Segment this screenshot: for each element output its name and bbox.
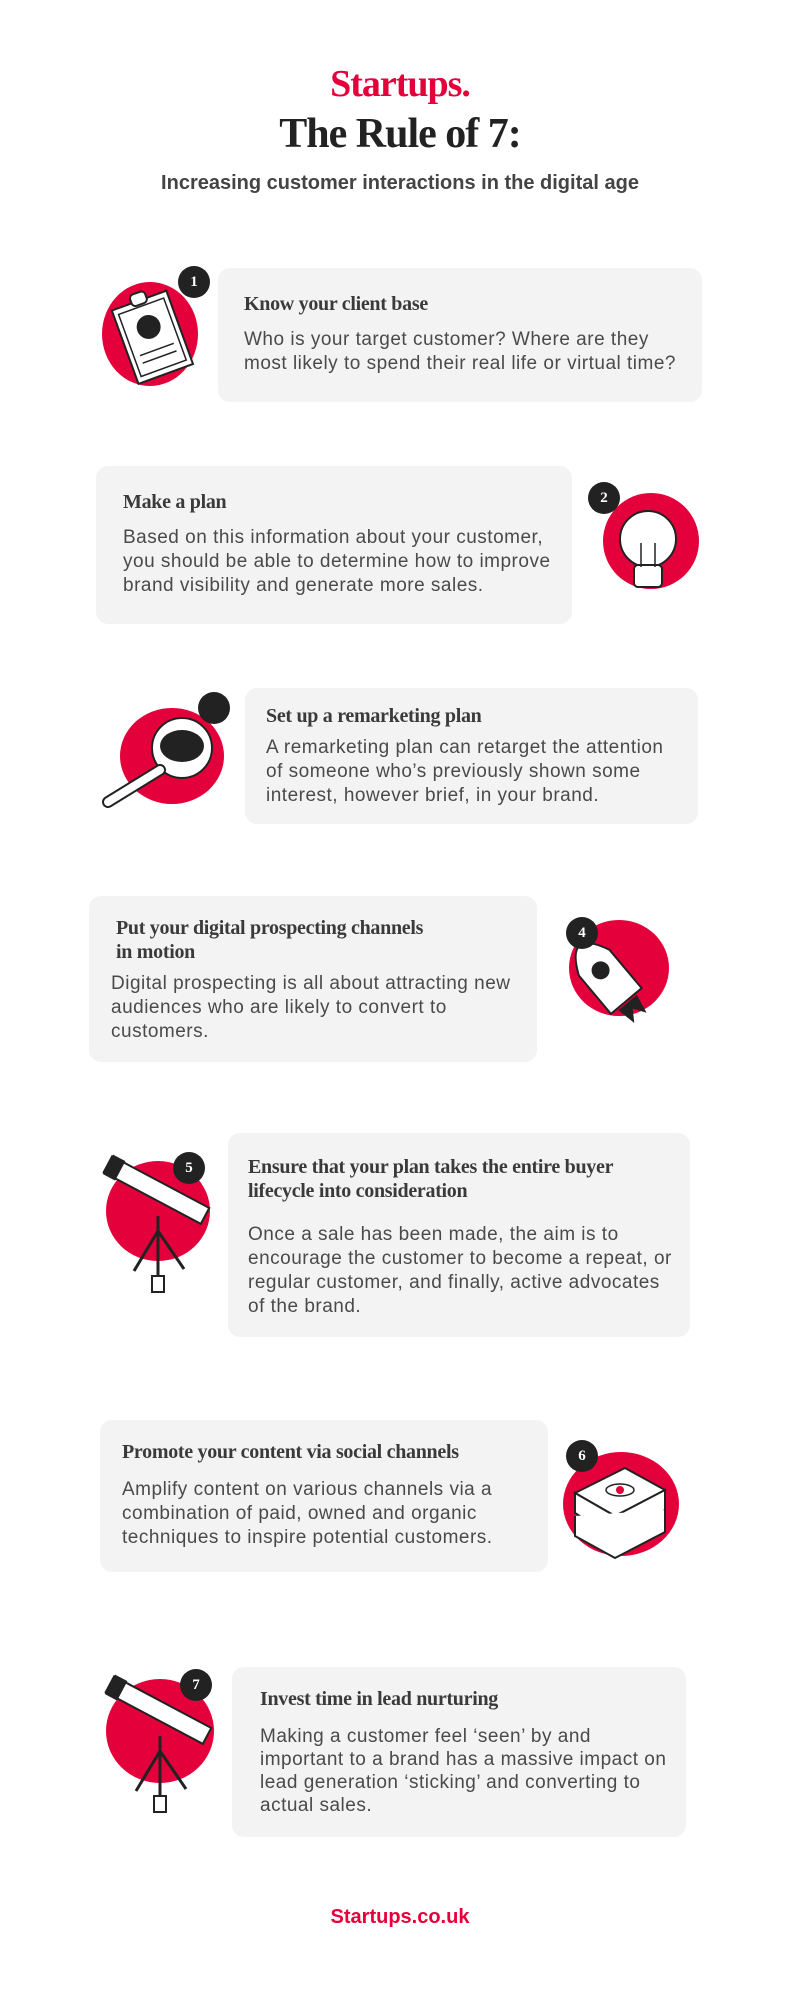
card 2: Make a plan: [123, 491, 226, 513]
badge 2: 2: [600, 490, 608, 506]
icon: telescope: [102, 1154, 211, 1293]
card 2: you should be able to determine how to improve: [123, 551, 551, 572]
card 7: Making a customer feel ‘seen’ by and: [260, 1726, 591, 1747]
icon: lightbulb: [603, 493, 699, 589]
card 6: Amplify content on various channels via a: [122, 1479, 492, 1500]
title: The Rule of 7:: [279, 111, 521, 157]
card 7: actual sales.: [260, 1795, 372, 1816]
card 1: [218, 268, 702, 402]
icon: clipboard: [102, 282, 198, 386]
card 3: [245, 688, 698, 824]
card 7: important to a brand has a massive impact on: [260, 1749, 666, 1770]
card 5: encourage the customer to become a repeat, or: [248, 1248, 672, 1269]
card 5: Ensure that your plan takes the entire buyer: [248, 1156, 613, 1178]
badge 2: [588, 482, 620, 514]
card 5: lifecycle into consideration: [248, 1180, 467, 1202]
step 6: [100, 1420, 679, 1572]
badge 5: 5: [185, 1160, 193, 1176]
card 6: Promote your content via social channels: [122, 1441, 459, 1463]
card 4: Digital prospecting is all about attracting new: [111, 973, 510, 994]
card 7: [232, 1667, 686, 1837]
badge 4: 4: [578, 925, 586, 941]
card 2: Based on this information about your customer,: [123, 527, 543, 548]
step 3: [102, 688, 698, 824]
step 2: [96, 466, 699, 624]
card 2: [96, 466, 572, 624]
logo: Startups.: [330, 63, 470, 105]
card 1: most likely to spend their real life or virtual time?: [244, 353, 676, 374]
card 6: [100, 1420, 548, 1572]
icon: rocket: [569, 920, 669, 1023]
card 4: audiences who are likely to convert to: [111, 997, 447, 1018]
card 5: regular customer, and finally, active advocates: [248, 1272, 660, 1293]
badge 6: [566, 1440, 598, 1472]
card 4: Put your digital prospecting channels: [116, 917, 423, 939]
icon: books: [563, 1452, 679, 1560]
badge 7: [180, 1669, 212, 1701]
badge 6: 6: [578, 1448, 586, 1464]
card 3: interest, however brief, in your brand.: [266, 785, 599, 806]
step 1: [102, 266, 702, 402]
icon: magnifier: [102, 708, 224, 808]
badge 7: 7: [192, 1677, 200, 1693]
icon: telescope: [104, 1674, 214, 1813]
badge 1: 1: [190, 274, 198, 290]
card 2: brand visibility and generate more sales.: [123, 575, 484, 596]
card 7: Invest time in lead nurturing: [260, 1688, 498, 1710]
step 4: [89, 896, 669, 1062]
card 1: Know your client base: [244, 293, 428, 315]
card 4: [89, 896, 537, 1062]
badge 4: [566, 917, 598, 949]
card 5: Once a sale has been made, the aim is to: [248, 1224, 619, 1245]
card 3: A remarketing plan can retarget the attention: [266, 737, 663, 758]
subtitle: Increasing customer interactions in the digital age: [161, 172, 639, 194]
badge 3: [198, 692, 230, 724]
step 5: [102, 1133, 690, 1337]
card 4: customers.: [111, 1021, 209, 1042]
badge 5: [173, 1152, 205, 1184]
badge 1: [178, 266, 210, 298]
card 6: combination of paid, owned and organic: [122, 1503, 477, 1524]
card 4: in motion: [116, 941, 195, 963]
card 5: of the brand.: [248, 1296, 361, 1317]
footer: Startups.co.uk: [331, 1906, 469, 1928]
card 7: lead generation ‘sticking’ and converting to: [260, 1772, 640, 1793]
card 3: Set up a remarketing plan: [266, 705, 481, 727]
step 7: [104, 1667, 686, 1837]
card 1: Who is your target customer? Where are they: [244, 329, 649, 350]
card 6: techniques to inspire potential customers.: [122, 1527, 493, 1548]
card 3: of someone who’s previously shown some: [266, 761, 641, 782]
card 5: [228, 1133, 690, 1337]
